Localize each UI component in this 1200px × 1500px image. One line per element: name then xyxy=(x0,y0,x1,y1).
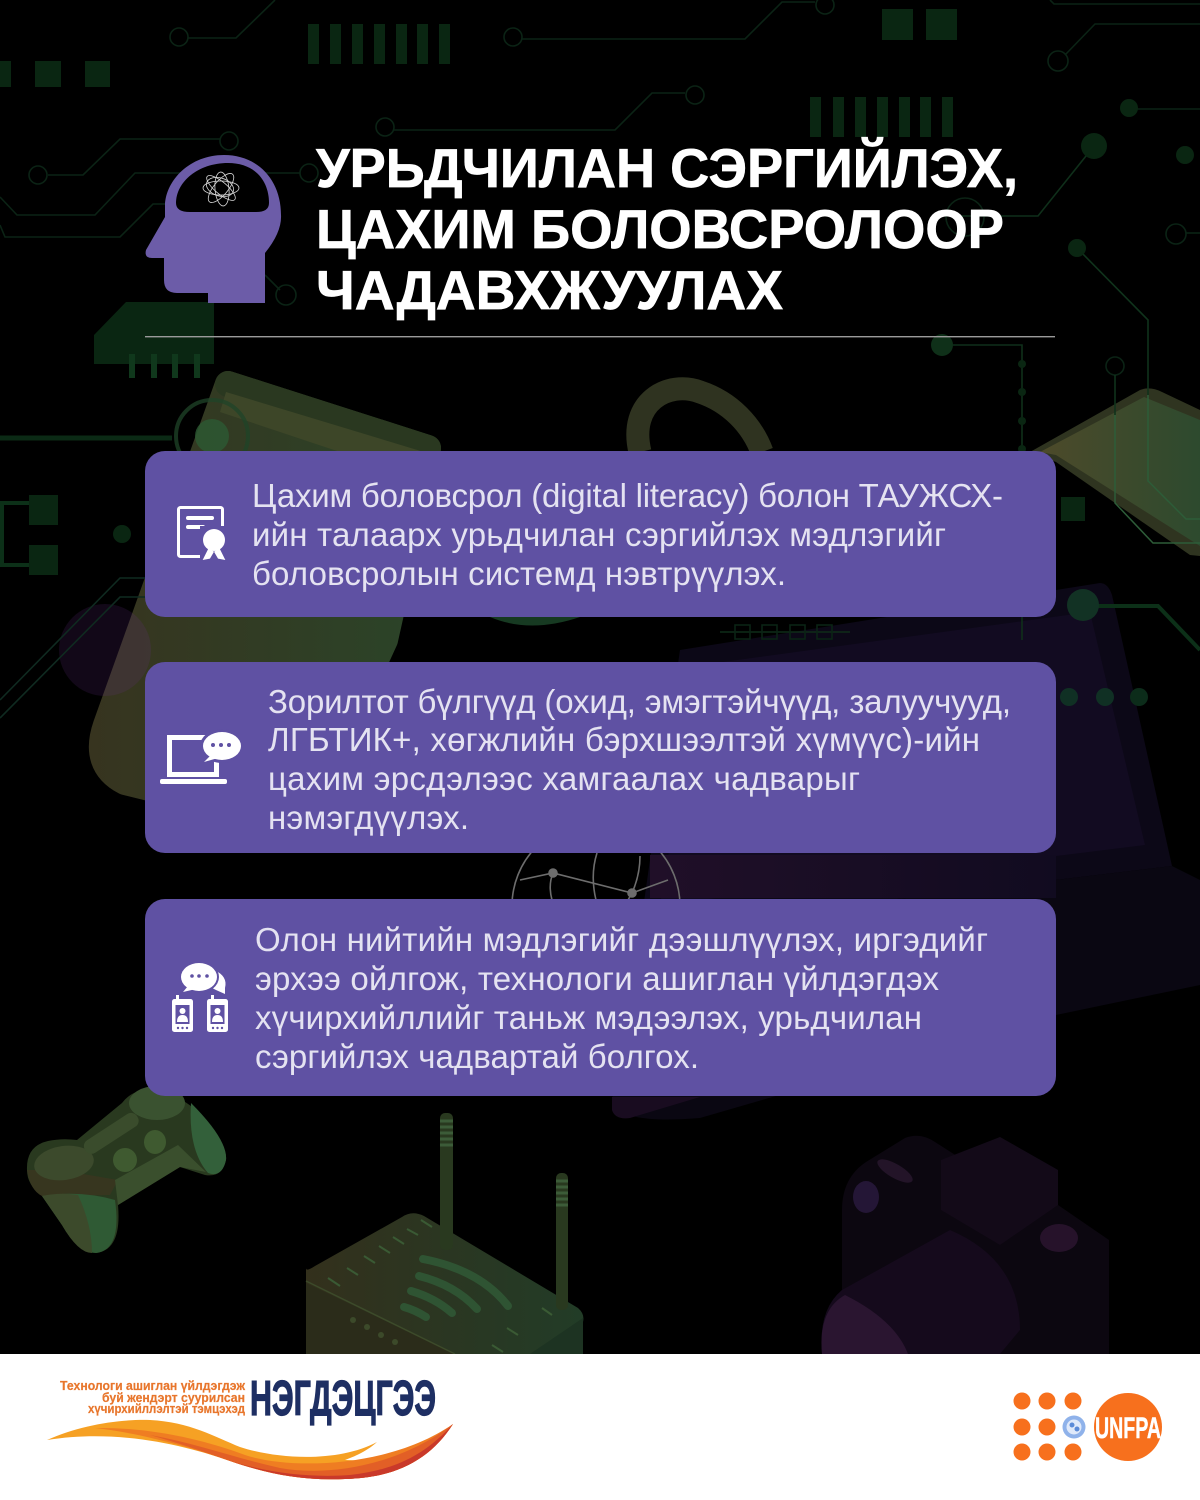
campaign logo xyxy=(47,1372,453,1479)
campaign tagline: хүчирхийллэлтэй тэмцэхэд xyxy=(88,1402,245,1416)
background: game controller xyxy=(27,1086,226,1253)
UNFPA badge: UNFPA xyxy=(1095,1412,1161,1445)
text: card 2: ЛГБТИК+, хөгжлийн бэрхшээлтэй хүмүүс)-ийн xyxy=(268,721,980,758)
icon: laptop with speech bubble xyxy=(160,729,244,784)
background: circuit blocks and dots xyxy=(0,9,1194,706)
background: camera xyxy=(821,1136,1109,1354)
campaign name: НЭГДЭЦГЭЭ xyxy=(250,1372,436,1426)
text: card 3: эрхээ ойлгож, технологи ашиглан үйлдэгдэх xyxy=(255,960,940,997)
UNFPA dot grid xyxy=(1014,1392,1082,1460)
background: padlock xyxy=(59,384,762,825)
background: circuit lines xyxy=(0,0,1200,718)
card 2: target groups xyxy=(145,662,1056,853)
text: card 2 xyxy=(268,683,1011,836)
icon: chat bubbles and phones xyxy=(172,961,228,1032)
campaign tagline: Технологи ашиглан үйлдэгдэж xyxy=(60,1379,245,1393)
text: card 1 xyxy=(252,477,1003,592)
background: wifi router xyxy=(306,1113,583,1354)
card 1: digital literacy xyxy=(145,451,1056,617)
text: card 3: хүчирхийллийг таньж мэдээлэх, урьдчилан xyxy=(255,999,922,1036)
background: globe xyxy=(512,822,680,990)
card 3: public awareness xyxy=(145,899,1056,1096)
UNFPA logo xyxy=(1014,1392,1162,1461)
title divider xyxy=(145,336,1055,337)
campaign tagline xyxy=(60,1379,245,1416)
icon: certificate xyxy=(178,508,230,564)
background: laptop xyxy=(612,583,1200,1120)
title icon: head with atom xyxy=(146,155,281,303)
text: card 1: боловсролын системд нэвтрүүлэх. xyxy=(252,555,786,592)
text: card 3 xyxy=(255,921,988,1075)
text: card 2: Зорилтот бүлгүүд (охид, эмэгтэйчүүд, залуучууд, xyxy=(268,683,1011,720)
campaign tagline: буй жендэрт суурилсан xyxy=(102,1391,245,1405)
title: ЦАХИМ БОЛОВСРОЛООР xyxy=(316,198,1004,260)
title: ЧАДАВХЖУУЛАХ xyxy=(316,259,783,321)
footer band xyxy=(0,1354,1200,1500)
title xyxy=(316,136,1018,321)
text: card 1: ийн талаарх урьдчилан сэргийлэх мэдлэгийг xyxy=(252,516,946,553)
text: card 3: Олон нийтийн мэдлэгийг дээшлүүлэх, иргэдийг xyxy=(255,921,988,958)
background: tablet xyxy=(1030,388,1200,556)
text: card 1: Цахим боловсрол (digital literacy) болон ТАУЖСХ- xyxy=(252,477,1003,514)
text: card 2: нэмэгдүүлэх. xyxy=(268,799,469,836)
text: card 2: цахим эрсдэлээс хамгаалах чадварыг xyxy=(268,760,860,797)
UNFPA badge xyxy=(1094,1393,1162,1461)
flame swoosh xyxy=(47,1420,453,1479)
UN emblem xyxy=(1062,1416,1086,1438)
text: card 3: сэргийлэх чадвартай болгох. xyxy=(255,1038,699,1075)
title: УРЬДЧИЛАН СЭРГИЙЛЭХ, xyxy=(316,136,1018,199)
